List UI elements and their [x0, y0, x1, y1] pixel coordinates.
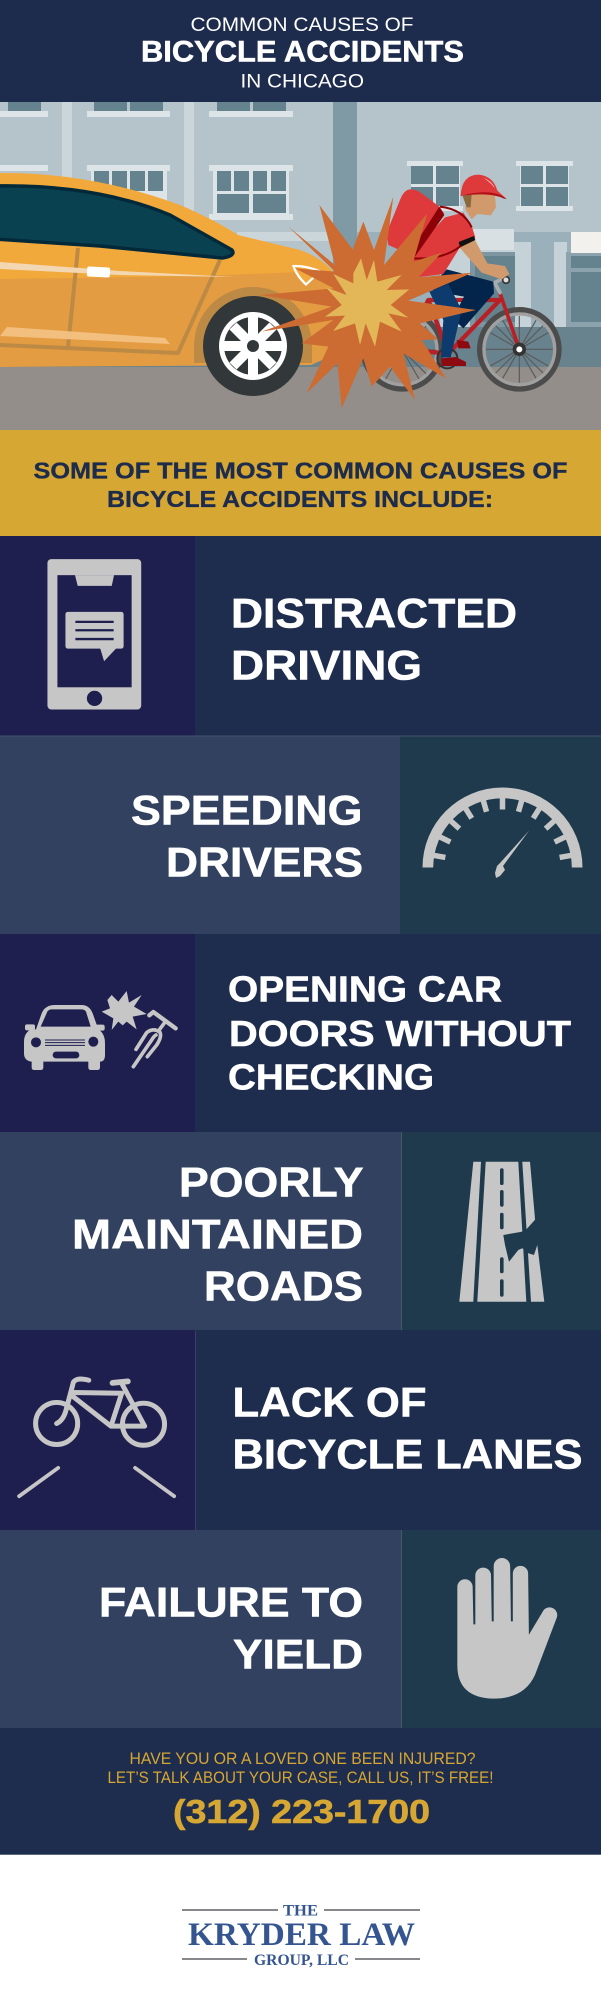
icon: bicycle between lane lines	[19, 1379, 174, 1496]
label: opening car doors without checking	[228, 968, 571, 1098]
logo text: group, llc: GROUP, LLC	[254, 1952, 349, 1969]
car front view	[24, 1005, 105, 1070]
label: speeding drivers	[131, 786, 363, 886]
panel: lack of bicycle lanes	[0, 1330, 601, 1530]
panel: poorly maintained roads	[0, 1132, 601, 1330]
cyclist arm	[459, 239, 509, 279]
cyclist shoe	[441, 357, 466, 366]
cyclist legs	[429, 269, 494, 357]
label: lack of bicycle lanes: LACK OF	[232, 1378, 426, 1426]
building facade details	[0, 102, 601, 367]
cyclist on red bicycle	[363, 175, 559, 389]
icon: damaged road	[459, 1162, 544, 1302]
logo text: the: THE	[283, 1902, 318, 1920]
panel: opening car doors	[0, 934, 601, 1132]
label: distracted driving	[231, 590, 517, 688]
label: poorly maintained roads	[72, 1158, 364, 1310]
panel: failure to yield	[0, 1530, 601, 1728]
icon: raised hand	[457, 1558, 557, 1699]
cyclist head and helmet	[461, 175, 507, 219]
backpack	[387, 189, 472, 259]
cyclist back leg and shoe	[457, 340, 471, 348]
illustration: car hitting cyclist on a city street	[0, 102, 601, 431]
title line: bicycle accidents: BICYCLE ACCIDENTS	[141, 36, 464, 68]
logo: the kryder law group	[182, 1902, 420, 1969]
call to action line 1: HAVE YOU OR A LOVED ONE BEEN INJURED?	[130, 1750, 476, 1768]
subheading text line 1: SOME OF THE MOST COMMON CAUSES OF	[34, 458, 568, 484]
label: failure to yield	[99, 1578, 363, 1678]
impact burst	[102, 991, 147, 1030]
icon: speedometer	[422, 788, 582, 878]
panel: call to action footer	[0, 1728, 601, 1855]
panel: distracted driving	[0, 536, 601, 736]
panel: speeding drivers	[0, 736, 601, 934]
title line: in chicago: IN CHICAGO	[240, 70, 364, 92]
label: failure to yield: YIELD	[233, 1630, 363, 1678]
title line: common causes of: COMMON CAUSES OF	[190, 14, 414, 36]
yellow taxi car	[0, 173, 345, 367]
road	[0, 367, 601, 431]
panel: header	[0, 0, 601, 102]
icon: car door and cyclist collision	[24, 991, 176, 1070]
label: distracted driving: DISTRACTED	[231, 590, 517, 636]
car headlight	[292, 265, 322, 286]
car window	[0, 186, 233, 258]
label: poorly maintained roads: POORLY	[179, 1158, 364, 1206]
phone number: (312) 223-1700	[173, 1793, 430, 1830]
label: speeding drivers: SPEEDING	[131, 786, 362, 834]
subheading text line 2: BICYCLE ACCIDENTS INCLUDE:	[107, 486, 493, 512]
logo text: kryder law: KRYDER LAW	[188, 1917, 415, 1953]
front bicycle wheel	[480, 310, 559, 389]
label: opening car doors without checking: DOORS WITHOUT	[229, 1013, 571, 1054]
label: lack of bicycle lanes	[232, 1378, 582, 1478]
label: failure to yield: FAILURE TO	[99, 1578, 363, 1626]
cyclist torso	[407, 213, 475, 277]
label: opening car doors without checking: CHECKING	[228, 1056, 434, 1098]
icon: smartphone with message	[47, 559, 141, 709]
label: opening car doors without checking: OPENING CAR	[228, 968, 502, 1010]
label: speeding drivers: DRIVERS	[166, 838, 363, 886]
call to action line 2: LET’S TALK ABOUT YOUR CASE, CALL US, IT’S FREE!	[108, 1769, 494, 1787]
label: poorly maintained roads: ROADS	[204, 1262, 363, 1310]
label: distracted driving: DRIVING	[231, 642, 422, 688]
crash explosion burst	[260, 197, 476, 408]
car front wheel	[194, 287, 312, 396]
panel: gold subheading	[0, 430, 601, 536]
bicycle frame	[403, 293, 519, 353]
rear bicycle wheel	[363, 311, 441, 389]
label: poorly maintained roads: MAINTAINED	[72, 1210, 363, 1258]
label: lack of bicycle lanes: BICYCLE LANES	[232, 1430, 582, 1478]
bicycle handlebar and fork	[133, 1012, 176, 1067]
